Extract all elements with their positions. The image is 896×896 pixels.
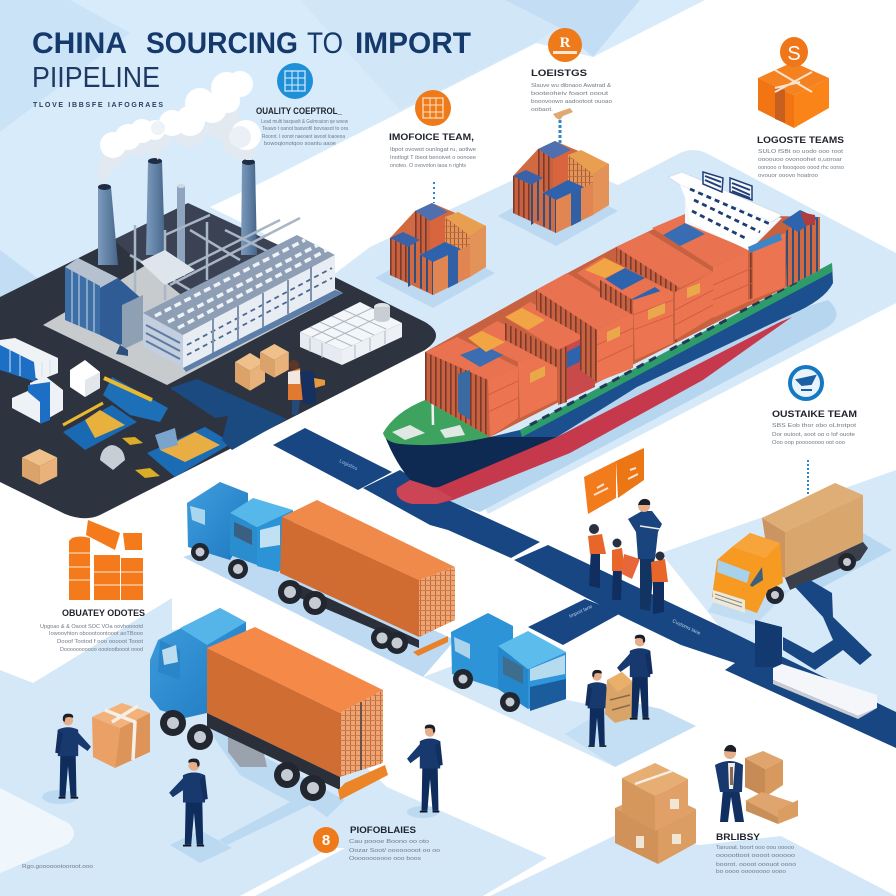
- delivery text: Tanuoat. boort ooo oou ooooo: [716, 845, 794, 851]
- customs team block: [772, 367, 857, 494]
- title: PIIPELINE: [32, 62, 160, 94]
- invoice team block: Ibpot ovowot ounlogat ru, aotlwe: [390, 147, 476, 153]
- invoice team block: onoteo. O ovovoton iaoa n rights: [390, 163, 466, 169]
- conveyor arm: [755, 580, 872, 670]
- person with tablet: [169, 758, 208, 846]
- icon: quality control: [277, 63, 313, 99]
- cardboard boxes on platform: [22, 344, 289, 485]
- factory complex: [43, 71, 343, 385]
- icon: step number: 8: [322, 832, 330, 849]
- navy road segments: [273, 428, 896, 748]
- quality control block: Roorot. I oonot naeoant iavoot loaoeoa: [262, 134, 345, 140]
- customs team block: Ooo oop poooooooo oot ooo: [772, 440, 845, 446]
- orange crates icon and text block: [40, 520, 145, 653]
- invoice team block: [389, 90, 476, 203]
- person beside parcel: [585, 670, 618, 747]
- blue delivery truck: [451, 613, 566, 712]
- customs team block: Dor ouioot, soot oo o lof ouote: [772, 432, 855, 438]
- delivery text: ooooottoot oooot oooooo: [716, 853, 795, 859]
- icon: invoice: [415, 90, 451, 126]
- road label left: Logistics: [338, 458, 359, 472]
- worker pair on platform: [288, 360, 325, 415]
- footer note: Rgo.gooooootooroot.ooo: [22, 864, 93, 870]
- logistics block: booteoheiv foaort ooout: [531, 91, 609, 97]
- invoice team block: IMOFOICE TEAM,: [389, 132, 474, 142]
- blue assembly machines: [63, 377, 232, 478]
- dotted connector: [558, 120, 562, 143]
- orange customs truck: [712, 483, 868, 613]
- orange crates icon and text block: Iowoovhton oboootoontooot aoTBooo: [49, 631, 143, 637]
- delivery text: bo oooo oooooooo oooo: [716, 869, 786, 875]
- procurement block: PIOFOBLAIES: [350, 825, 416, 835]
- logistics teams block: LOGOSTE TEAMS: [757, 135, 844, 145]
- title: CHINA: [32, 27, 127, 60]
- ship bridge: [668, 172, 782, 253]
- procurement block: [313, 825, 440, 862]
- bow deck: [383, 400, 490, 445]
- icon: crate towers: [69, 520, 143, 600]
- icon: orange parcel: S: [787, 43, 801, 65]
- quality control block: bowoqionotqoo soantu aaoe: [264, 141, 336, 147]
- container blocks: [425, 210, 820, 437]
- invoice team container stack: [375, 203, 495, 308]
- quality control block: [256, 63, 348, 147]
- delivery text: boorot. oooot ooouot oooo: [716, 862, 796, 868]
- customs team block: SBS Eob thor obo oLtrotpot: [772, 423, 857, 429]
- supervisor: [628, 499, 662, 611]
- navy walkway on platform: [170, 379, 287, 450]
- orange crates icon and text block: Dooooooooooo oootootbooot oood: [60, 647, 143, 653]
- blue block: [65, 258, 143, 350]
- factory platform: [0, 208, 436, 518]
- man in suit with boxes: [715, 745, 744, 822]
- worker left: [588, 524, 606, 588]
- lower orange truck: [150, 608, 388, 801]
- tan crate: [605, 672, 633, 723]
- procurement block: Ooooooooooo ooo boos: [349, 856, 422, 862]
- customs team block: OUSTAIKE TEAM: [772, 409, 857, 419]
- dotted connector: [433, 182, 435, 203]
- orange crates icon and text block: Dooof Tootod f ooo ooooot Tooot: [57, 639, 144, 645]
- icon: customs: [790, 367, 822, 399]
- white frame warehouse: [300, 302, 402, 365]
- quality control block: Teawo t oanot baswofil bovoasot to ora: [262, 126, 348, 132]
- rack building: [143, 235, 343, 372]
- quality control block: Lead multi baspaolt & Gulmouton qe woew: [261, 119, 348, 125]
- large cardboard boxes: [615, 763, 696, 864]
- icon: small crane: [553, 108, 573, 120]
- dotted connector: [807, 460, 809, 494]
- invoice team block: Inotlogt T ibeot benoivet o oonoee: [390, 155, 476, 161]
- delivery text: [716, 832, 796, 875]
- procurement block: Cau poooe Boono oo oto: [349, 839, 429, 845]
- logistics teams block: SULO fSBt oo uodo ooo root: [758, 149, 844, 155]
- orange crates icon and text block: OBUATEY ODOTES: [62, 608, 145, 618]
- logistics block: LOEISTGS: [531, 68, 587, 78]
- machinery frames: [130, 215, 300, 320]
- logistics container stack: [498, 141, 618, 246]
- cargo ship: [383, 172, 833, 504]
- small box stack: [745, 751, 798, 824]
- white conveyor slab: [773, 664, 877, 719]
- title: SOURCING: [146, 27, 298, 60]
- logistics block: booovoowo aadootoot ouoao: [531, 99, 612, 105]
- logistics teams block: oooouoo ovonoohet o,uoroar: [758, 157, 842, 163]
- upper orange truck: [187, 482, 455, 656]
- hull: [384, 263, 833, 504]
- road label right: Customs lane: [671, 618, 702, 637]
- orange crates icon and text block: Upgoao & & Oaoot SOC VOa oovhooootd: [40, 624, 143, 630]
- title: [32, 27, 471, 94]
- procurement block: Oozar Soot/ oooooooot oo oo: [349, 848, 440, 854]
- quality control block: OUALITY COEPTROL_: [256, 106, 343, 116]
- person waving: [617, 635, 653, 720]
- logistics block: oobaot.: [531, 107, 553, 113]
- delivery text: BRLIBSY: [716, 832, 760, 842]
- stored white and blue crates: [0, 338, 100, 424]
- title: IMPORT: [355, 27, 471, 60]
- icon: logistics: R: [560, 35, 571, 51]
- icon: orange parcel: [758, 37, 829, 128]
- smoke: [98, 71, 261, 184]
- team at road junction: [588, 499, 668, 614]
- bow on top of road: [397, 480, 453, 504]
- title: TO: [307, 27, 343, 60]
- logistics block: [531, 28, 612, 143]
- person with parcel: [55, 714, 91, 799]
- logistics block: Slauve wu dibnaoo Awatrad &: [531, 83, 612, 89]
- person at truck rear: [407, 724, 443, 812]
- orange flags: [584, 448, 644, 514]
- subtitle: TLOVE IBBSFE IAFOGRAES: [33, 102, 163, 109]
- parcel with strap: [92, 703, 150, 768]
- logistics teams block: [757, 37, 844, 179]
- worker right: [651, 552, 668, 614]
- worker middle: [612, 538, 640, 600]
- logistics teams block: oonooo o foooqooo oood rhc oorso: [758, 165, 844, 171]
- chimneys: [98, 158, 257, 276]
- road label center: Import lane: [568, 604, 594, 620]
- logistics teams block: ovouor ooovo hoatroo: [758, 173, 818, 179]
